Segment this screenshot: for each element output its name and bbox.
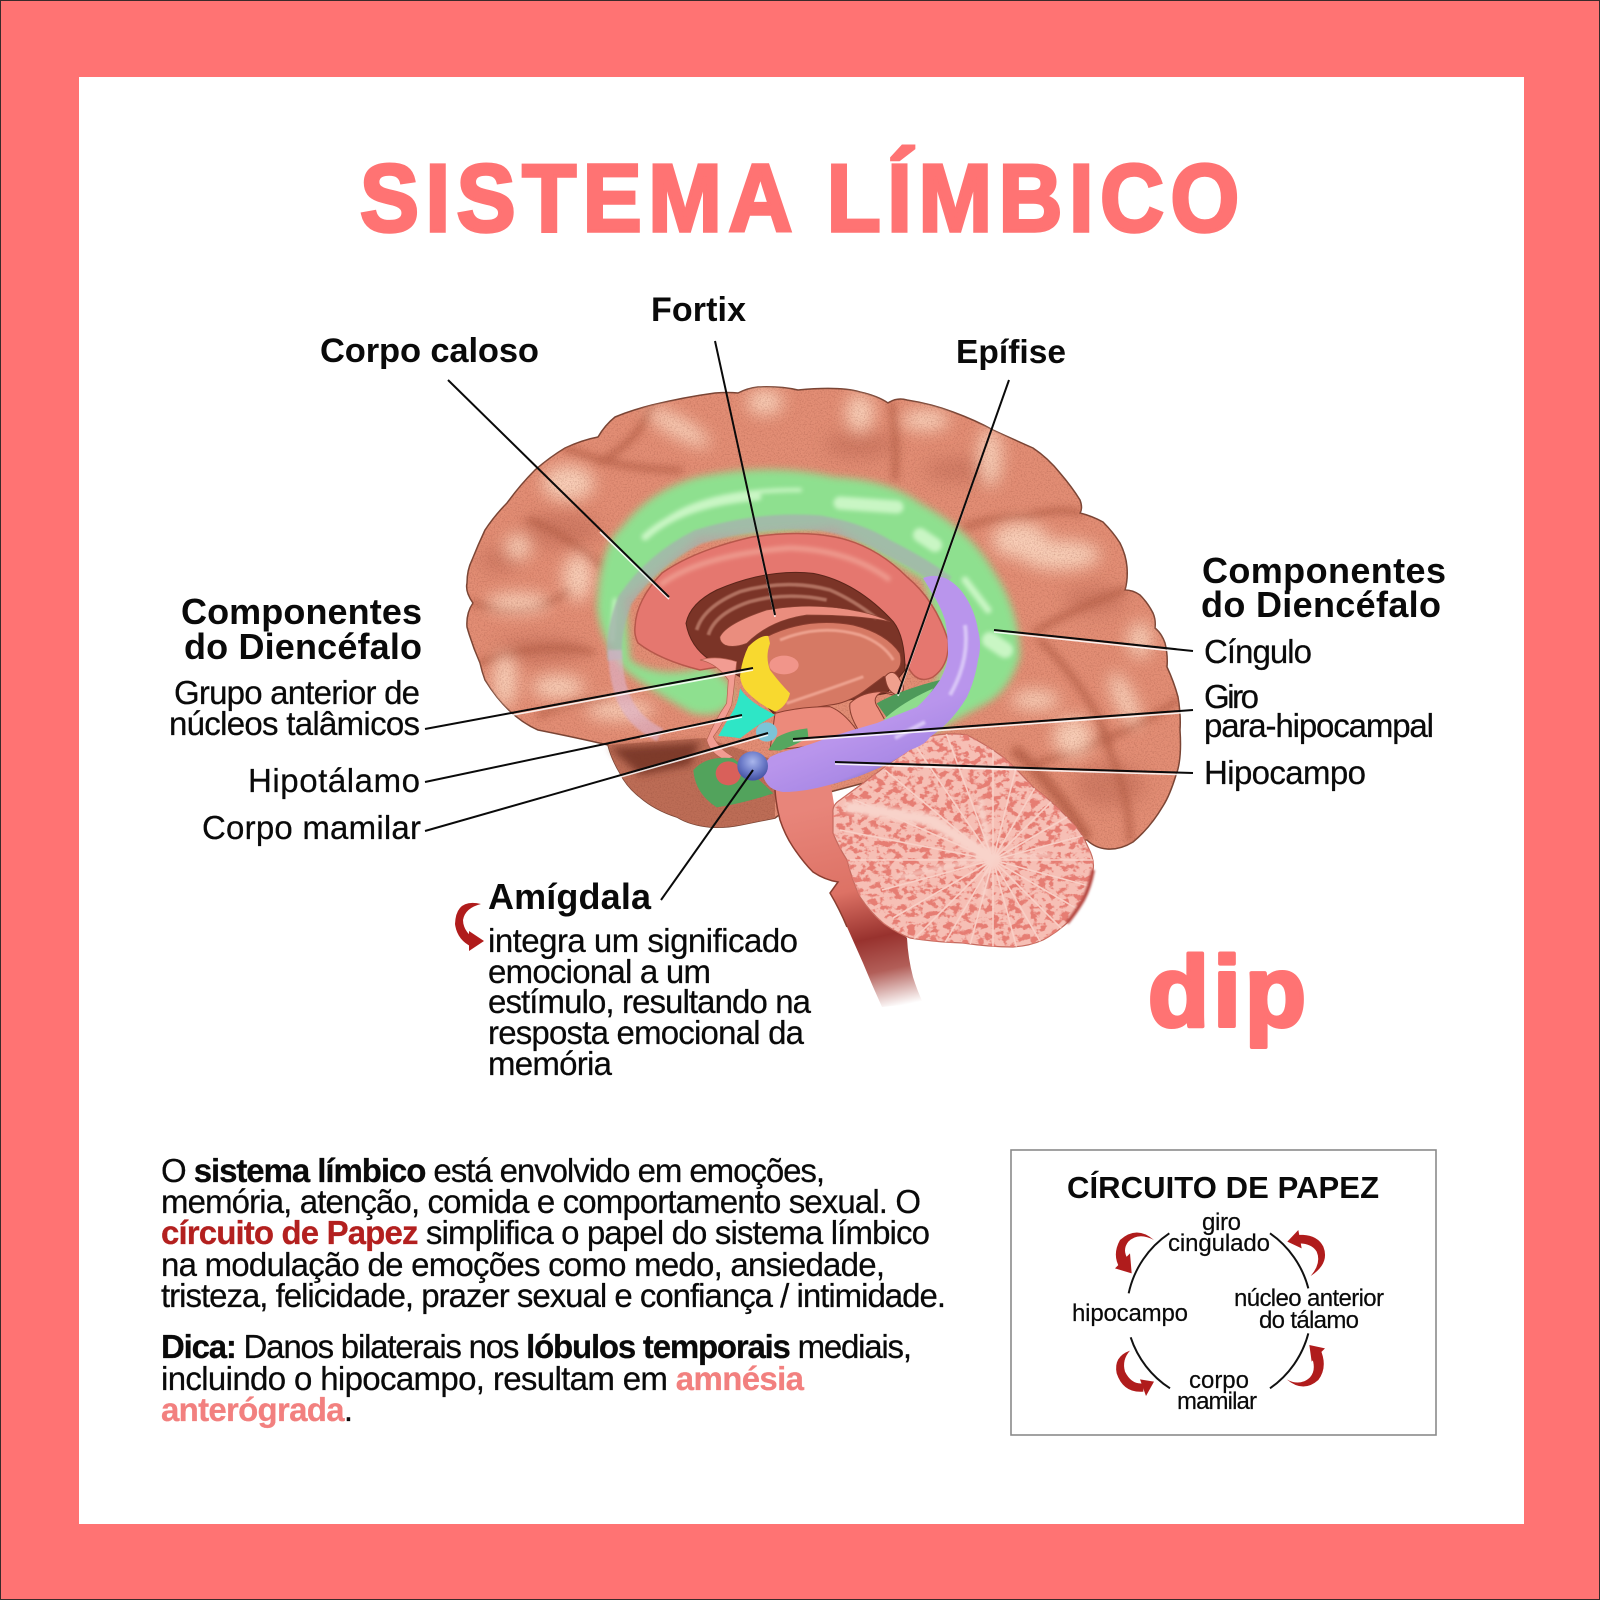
node: giro cingulado: giro (1202, 1209, 1241, 1236)
heading: Componentes do Diencéfalo right (1201, 550, 1446, 625)
node: corpo mamilar: corpo (1189, 1367, 1249, 1394)
brain: red nodule (716, 761, 741, 785)
brain: surface grain (460, 380, 1185, 855)
text: Amígdala description: emocional a um (488, 953, 711, 990)
node: núcleo anterior do tálamo: do tálamo (1259, 1307, 1359, 1334)
brain: cerebrum (467, 387, 1181, 849)
text block: sistema límbico description: memória, atenção, comida e comportamento sexual. O (161, 1183, 921, 1220)
brain: limbic structures (693, 636, 808, 807)
label: Hipocampo: Hipocampo (1204, 754, 1366, 791)
diagram: circuit arcs (1129, 1233, 1308, 1388)
label: Giro para-hipocampal: Giro (1204, 678, 1259, 715)
icon: curved red arrow (455, 903, 484, 951)
brain: thalamus (740, 623, 901, 713)
text: Amígdala description: memória (488, 1045, 613, 1082)
leader lines (425, 341, 1193, 900)
brain: septum (700, 658, 737, 760)
brain: lower temporal dark area (608, 738, 775, 827)
label: Corpo mamilar: Corpo mamilar (202, 809, 421, 846)
text block: dica (161, 1328, 912, 1428)
brain: grey ring (614, 522, 947, 735)
label: Grupo anterior de núcleos talâmicos: núcleos talâmicos (169, 705, 420, 742)
heading: Componentes do Diencéfalo left (181, 591, 422, 667)
title: SISTEMA LÍMBICO (360, 145, 1246, 252)
text block: sistema límbico description: círcuito de Papez simplifica o papel do sistema límbico (161, 1214, 930, 1251)
text block: sistema límbico description (161, 1152, 946, 1314)
brain: dark ventricle (686, 572, 905, 713)
brain: fornix (720, 606, 890, 646)
text: Amígdala description: resposta emocional da (488, 1014, 805, 1051)
brain: amygdala blue (737, 751, 768, 781)
brain: hypothalamus cyan (718, 688, 775, 738)
heading: Componentes do Diencéfalo right: Componentes (1202, 550, 1446, 591)
brain: midbrain salmon (770, 707, 860, 750)
text: Amígdala description: estímulo, resultando na (488, 983, 812, 1020)
label: Giro para-hipocampal: para-hipocampal (1204, 707, 1434, 744)
brain: dark green patch (693, 758, 773, 807)
text block: sistema límbico description: na modulação de emoções como medo, ansiedade, (161, 1246, 885, 1283)
brain: anterior thalamic nuclei yellow (740, 636, 790, 712)
labels: right column (1201, 550, 1446, 791)
heading: Componentes do Diencéfalo left: do Diencéfalo (184, 626, 422, 667)
heading: Componentes do Diencéfalo right: do Diencéfalo (1201, 584, 1441, 625)
text: Amígdala description: integra um significado (488, 922, 798, 959)
brain: right dark green (877, 680, 940, 727)
heading: circuito de Papez: CÍRCUITO DE PAPEZ (1067, 1170, 1379, 1205)
label: Grupo anterior de núcleos talâmicos: Grupo anterior de (174, 674, 420, 711)
node: hipocampo: hipocampo (1072, 1300, 1188, 1327)
text block: dica: Dica: Danos bilaterais nos lóbulos temporais mediais, (161, 1328, 912, 1365)
heading: Amígdala: Amígdala (488, 876, 652, 917)
brain: brainstem (775, 780, 923, 1007)
brain: cerebellum (832, 733, 1096, 948)
label: Giro para-hipocampal (1204, 678, 1434, 744)
label: Corpo caloso: Corpo caloso (320, 332, 539, 370)
node: corpo mamilar: mamilar (1177, 1388, 1257, 1415)
labels: left column (169, 591, 422, 846)
brain: green cingulate band (597, 470, 1020, 745)
node: giro cingulado (1168, 1209, 1270, 1257)
label: Fortix: Fortix (651, 291, 746, 329)
panel: circuito de Papez (1011, 1150, 1436, 1435)
label: Epífise: Epífise (956, 334, 1066, 371)
text block: dica: anterógrada. (161, 1391, 353, 1428)
label: Grupo anterior de núcleos talâmicos (169, 674, 420, 742)
text: Amígdala description (488, 922, 812, 1082)
brain: centre structures (686, 572, 940, 760)
brain: corpus callosum (635, 534, 948, 679)
node: núcleo anterior do tálamo (1234, 1285, 1384, 1334)
text block: dica: incluindo o hipocampo, resultam em amnésia (161, 1360, 805, 1397)
brain: mammillary body ring (756, 722, 777, 742)
label: Hipotálamo: Hipotálamo (248, 762, 420, 799)
node: núcleo anterior do tálamo: núcleo anterior (1234, 1285, 1384, 1312)
text block: sistema límbico description: O sistema límbico está envolvido em emoções, (161, 1152, 825, 1189)
heading: Componentes do Diencéfalo left: Componentes (181, 591, 422, 632)
node: giro cingulado: cingulado (1168, 1230, 1270, 1257)
brain: hippocampus purple (763, 576, 980, 792)
logo: dip: dip (1148, 936, 1306, 1048)
icons: red circular arrows (1115, 1230, 1325, 1396)
text block: sistema límbico description: tristeza, felicidade, prazer sexual e confiança / intimidade. (161, 1277, 946, 1314)
brain illustration (460, 380, 1185, 1007)
label: Cíngulo: Cíngulo (1204, 633, 1312, 670)
callout: Amígdala (455, 876, 812, 1082)
node: corpo mamilar (1177, 1367, 1257, 1415)
